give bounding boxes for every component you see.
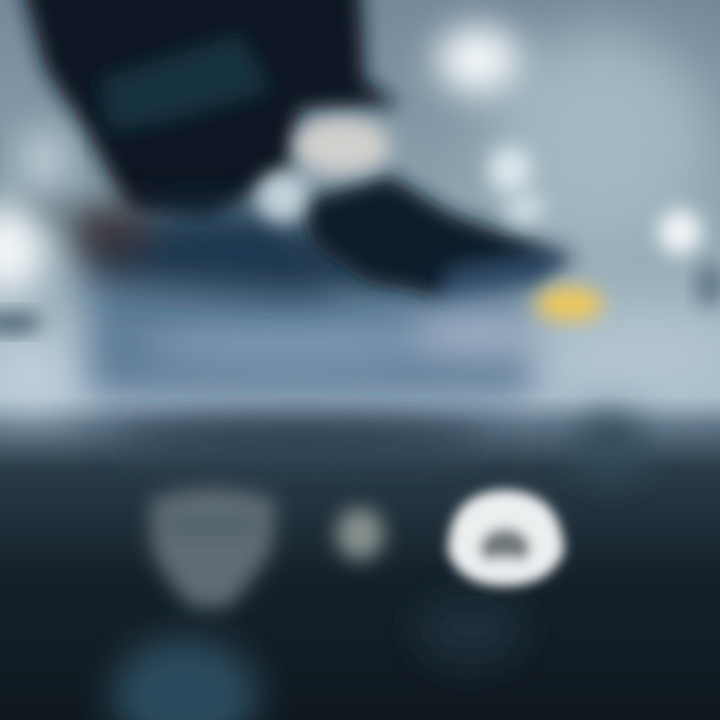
- figure: lower leg and shadow: [27, 198, 400, 300]
- icon: white dome: [448, 490, 564, 586]
- band: misty blue middle: [90, 280, 550, 395]
- icon: small dot: [336, 508, 384, 560]
- icon: grey shield: [150, 488, 276, 608]
- icon: dark shoe: [300, 175, 575, 298]
- bokeh lights: [0, 26, 720, 307]
- figure: dark trousers: [20, 0, 400, 225]
- accent: yellow glow: [536, 287, 604, 321]
- dark water texture: [110, 413, 646, 666]
- blob: teal lower glow: [111, 637, 259, 720]
- band: horizon shadow at left: [0, 311, 42, 333]
- sock: pale ankle highlight: [294, 118, 390, 174]
- background: light right haze: [0, 30, 720, 410]
